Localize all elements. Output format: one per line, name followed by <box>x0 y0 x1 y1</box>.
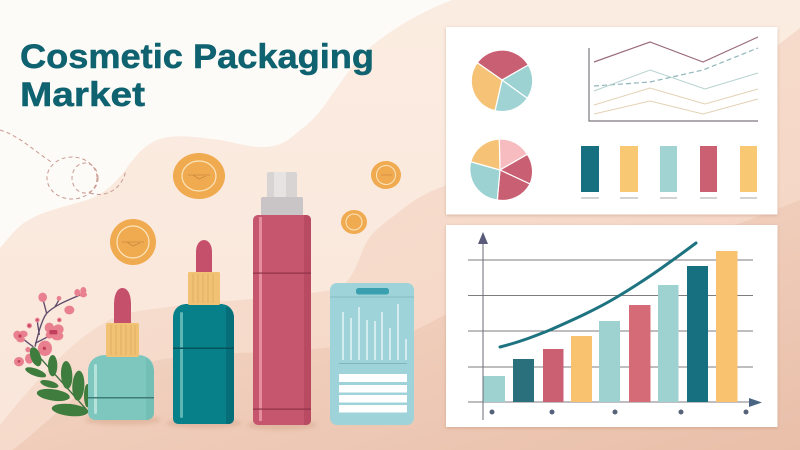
coin: top right <box>371 161 401 189</box>
floral sprig <box>13 287 91 418</box>
pie chart: top <box>471 50 533 112</box>
title: Market <box>20 76 145 114</box>
pie chart: bottom <box>470 139 533 200</box>
product: teal bottle <box>166 240 242 428</box>
axis dots <box>490 410 748 414</box>
growth bars <box>483 251 738 402</box>
product: aqua jar with dropper <box>85 288 161 425</box>
panel: growth bar chart <box>446 225 778 427</box>
bar row <box>581 146 757 198</box>
product: tall red bottle with silver cap <box>247 172 317 430</box>
title <box>20 38 374 114</box>
coin: large centre <box>173 153 225 199</box>
axes with arrows <box>478 232 762 420</box>
title: Cosmetic Packaging <box>20 38 374 76</box>
panel: pies, line chart and bars <box>446 27 778 214</box>
coin: left <box>110 219 156 265</box>
dashed swirl decoration <box>0 130 126 199</box>
trend curve <box>500 243 696 347</box>
line chart <box>589 37 758 121</box>
coin: small right <box>341 210 367 234</box>
product: blue label card <box>330 283 414 425</box>
